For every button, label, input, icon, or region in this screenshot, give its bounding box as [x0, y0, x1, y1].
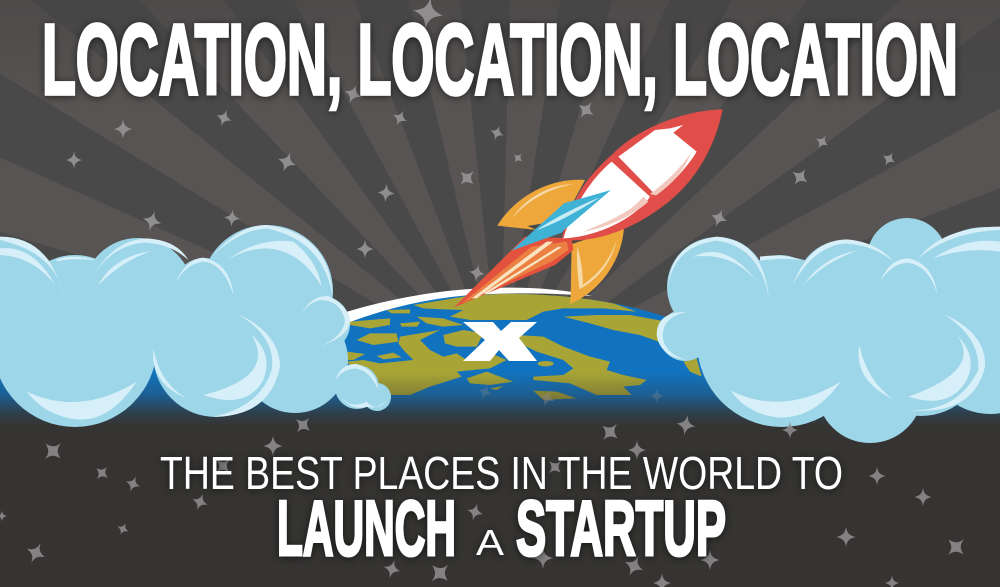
horizon atmosphere white arc: [346, 288, 592, 322]
rocket white hull: [563, 162, 650, 238]
dark ground band: [0, 425, 1000, 587]
headline: launch a startup: LAUNCH: [277, 484, 456, 572]
rocket exhaust flame: [454, 237, 573, 307]
background sunburst rays: [0, 0, 1000, 440]
rocket blue wing: [512, 190, 611, 251]
land masses: [347, 293, 702, 400]
atmosphere fade into the dark ground: [0, 372, 1000, 426]
headline: launch a startup: A: [476, 522, 504, 563]
earth globe: [0, 294, 1000, 425]
left cloud: [0, 225, 391, 427]
stars, lower ground: [0, 382, 972, 587]
rocket upper fin: [497, 180, 585, 230]
rocket body: [562, 109, 723, 240]
rocket lower fin: [570, 227, 624, 304]
rocket: [454, 109, 723, 307]
cloud highlights: [0, 225, 387, 420]
headline: launch a startup: STARTUP: [516, 484, 726, 572]
logo: white X on the globe: [463, 322, 537, 361]
right cloud: [657, 218, 1000, 443]
stars behind the earth, upper sky: [66, 0, 899, 283]
cloud highlights: [657, 227, 1000, 418]
subtitle: THE BEST PLACES IN THE WORLD TO: [160, 447, 843, 499]
